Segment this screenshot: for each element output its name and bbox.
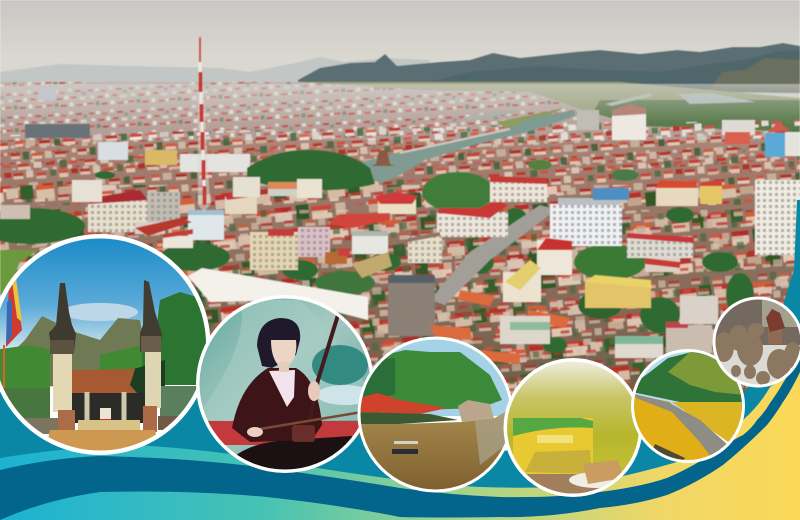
left low wall and garden — [0, 388, 60, 434]
steps — [78, 420, 140, 430]
head scarf — [257, 318, 300, 368]
near city band — [0, 185, 800, 430]
clouds — [62, 303, 138, 321]
building: right white tower — [755, 180, 800, 255]
building: upper right block cluster — [722, 120, 755, 144]
left pillar — [49, 283, 76, 432]
far city band — [0, 82, 600, 170]
low houses — [500, 258, 718, 358]
water reflection — [475, 408, 512, 465]
lower-left red roofs — [135, 218, 193, 248]
wood table — [505, 472, 641, 500]
distant hazy hills — [0, 57, 430, 92]
road — [634, 394, 728, 458]
buildings — [0, 104, 800, 364]
altar — [100, 408, 111, 420]
trees — [632, 350, 744, 410]
river — [358, 408, 512, 495]
instrument neck — [316, 315, 340, 386]
backdrop swirl pale — [318, 385, 362, 405]
upper river channel — [465, 110, 517, 120]
large white roof — [188, 268, 368, 320]
building: red-roof long block — [437, 200, 508, 237]
building: yellow-roof block — [503, 260, 541, 302]
upper channel — [605, 93, 652, 106]
building: red-roof villa — [375, 192, 418, 214]
dark shrub — [650, 444, 685, 464]
building: red-roof row centre — [655, 180, 722, 206]
yellow-green foliage — [668, 352, 744, 395]
dark hall — [70, 393, 146, 423]
floor — [713, 345, 800, 390]
palm plantation on the right — [590, 100, 800, 136]
building: cream office — [250, 229, 298, 270]
river — [362, 110, 575, 184]
blurred backdrop — [505, 358, 641, 498]
tree clumps — [0, 150, 754, 353]
courtyard — [48, 430, 156, 450]
skirt — [236, 436, 352, 470]
building: red-roof low row — [328, 213, 390, 228]
building: pale row — [233, 177, 322, 198]
dark blue swoosh — [0, 352, 800, 520]
circle ring — [196, 295, 374, 473]
circle ring — [631, 349, 745, 463]
horizon haze over the far city — [0, 84, 800, 124]
ponds — [678, 93, 756, 104]
circle ring — [504, 358, 642, 497]
building: grey-brown tower — [388, 275, 435, 336]
building: large white office — [550, 198, 622, 246]
bow — [259, 412, 358, 430]
building: yellow-roof villa — [585, 275, 652, 308]
decorative wave band — [0, 200, 800, 520]
photo circle: river island temple — [358, 336, 514, 495]
white shirt — [269, 370, 295, 407]
potter — [766, 309, 785, 344]
building: distant grey tower — [577, 110, 599, 130]
photo circle: temple gate — [0, 234, 210, 455]
backdrop swirl light — [200, 300, 372, 420]
cracker — [583, 460, 624, 484]
hand — [308, 381, 320, 401]
pagoda by the river — [371, 150, 395, 166]
small posts — [87, 392, 124, 420]
orange roof cluster — [430, 290, 570, 364]
photo circle: pottery — [712, 296, 800, 390]
building: blue tower — [765, 122, 800, 157]
right pillar — [140, 280, 162, 432]
near city offset layer — [0, 210, 800, 430]
right low wall and garden — [158, 386, 200, 430]
mid foliage — [0, 345, 142, 400]
right tree — [142, 292, 206, 385]
temple roof — [70, 369, 137, 393]
tree mass — [358, 350, 502, 412]
neck — [279, 362, 289, 372]
jars — [714, 323, 800, 385]
limestone mountain range — [298, 43, 800, 93]
workshop wall — [713, 297, 800, 347]
green field at left — [0, 250, 38, 295]
plain behind the city — [300, 82, 800, 140]
flag — [4, 278, 22, 395]
warm colour grade over the city — [0, 140, 800, 430]
mid city band — [0, 120, 800, 205]
building: white and blue block — [188, 210, 224, 240]
building: blue-front block — [593, 188, 629, 200]
circle ring — [0, 234, 210, 455]
rock — [458, 400, 494, 422]
building: large red-roof office — [88, 190, 150, 232]
limestone hills — [0, 316, 150, 390]
building: red-roof long office — [627, 233, 694, 258]
product box — [513, 418, 593, 474]
face — [271, 340, 296, 366]
left distant stadium and blocks — [25, 86, 250, 172]
building: cream office with red roof — [225, 192, 257, 214]
teal wave — [0, 200, 800, 520]
photo circle: musician — [195, 295, 375, 475]
building: pink block — [298, 227, 330, 257]
blouse body — [232, 368, 322, 442]
sky — [632, 349, 744, 409]
red stage band — [208, 421, 359, 445]
building: white riverside tower — [612, 104, 646, 140]
instrument body — [292, 425, 315, 442]
building: white block with grey roof — [352, 231, 388, 254]
boat — [392, 441, 418, 454]
sky — [0, 234, 210, 354]
main road — [430, 205, 556, 305]
hazy sky — [0, 0, 800, 100]
pale wall panel — [762, 297, 800, 327]
building: red-roof white block — [537, 238, 572, 275]
far city band right — [600, 122, 800, 175]
levee green — [497, 108, 563, 128]
temple — [358, 393, 447, 414]
gradient lower-right field and yellow stripe — [0, 350, 800, 520]
backdrop — [200, 298, 370, 470]
circle ring — [358, 336, 514, 492]
building: red-roof small — [325, 248, 350, 264]
far bank — [358, 412, 458, 424]
photo circle: rice cracker product — [504, 358, 642, 500]
river bank road — [400, 129, 510, 153]
photo circle: rice field road — [631, 349, 745, 464]
darker tree edge — [362, 358, 395, 399]
building: cream block — [408, 232, 442, 263]
building: red-roof row right — [490, 176, 547, 202]
circle ring — [712, 296, 800, 388]
building: pale left blocks — [0, 180, 102, 219]
base city colour — [0, 82, 800, 440]
dark shade under tree — [130, 360, 165, 395]
right field — [672, 402, 744, 442]
left hand — [247, 427, 263, 437]
building: tan roof — [352, 252, 392, 278]
radio tower — [198, 37, 210, 212]
plate — [569, 472, 625, 488]
building: grey block — [147, 192, 180, 222]
sky — [358, 336, 514, 416]
left field — [632, 394, 716, 462]
backdrop swirl dark — [312, 345, 368, 385]
